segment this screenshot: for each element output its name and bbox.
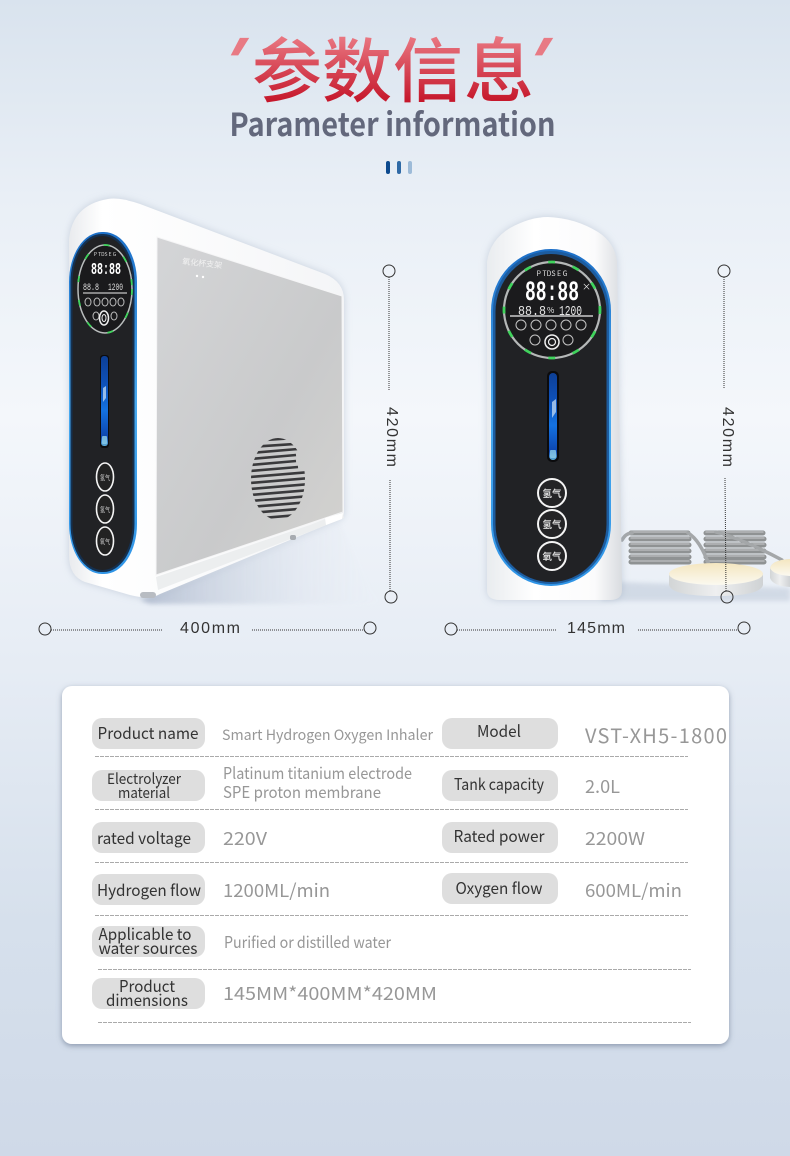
english subheading: Parameter information bbox=[230, 100, 556, 146]
display: 1200 bbox=[559, 304, 582, 320]
chinese heading: 息 bbox=[464, 16, 534, 117]
row: electrolyzer material: material bbox=[118, 782, 170, 803]
row: hydrogen and oxygen flow bbox=[92, 873, 682, 905]
power button bbox=[545, 335, 559, 349]
row: product name: VST-XH5-1800 bbox=[585, 720, 727, 749]
product: front view bbox=[487, 217, 790, 601]
three round buttons: 氧气 bbox=[100, 537, 110, 547]
display: 1200 bbox=[108, 283, 123, 294]
row: rated voltage: 220V bbox=[223, 825, 268, 851]
dimension: side view width 400mm: 400mm bbox=[180, 620, 240, 637]
row: electrolyzer material: Platinum titanium electrode bbox=[223, 760, 412, 784]
row: product dimensions: dimensions bbox=[106, 987, 188, 1011]
row: electrolyzer material: Tank capacity bbox=[454, 771, 545, 795]
row: rated voltage: rated voltage bbox=[97, 825, 191, 849]
three round buttons: 氧气 bbox=[542, 549, 562, 563]
row: hydrogen and oxygen flow: Oxygen flow bbox=[456, 875, 543, 899]
dimension: side view height 420mm: 420mm bbox=[383, 407, 400, 467]
display bbox=[78, 245, 132, 333]
dimension: side view width 400mm bbox=[39, 620, 376, 637]
three round buttons: 氢气 bbox=[100, 473, 110, 483]
row: product name: Smart Hydrogen Oxygen Inhaler bbox=[222, 724, 433, 745]
row: hydrogen and oxygen flow: 600ML/min bbox=[585, 877, 682, 903]
chinese heading bbox=[252, 16, 534, 117]
row: hydrogen and oxygen flow: 1200ML/min bbox=[223, 877, 330, 903]
white card bbox=[62, 686, 729, 1044]
black front capsule with blue ring bbox=[69, 232, 137, 574]
display: P TDS E G bbox=[94, 251, 117, 258]
row dividers bbox=[95, 756, 691, 1022]
three round buttons: 氢气 bbox=[100, 505, 110, 515]
water level window bbox=[100, 355, 109, 448]
left quote mark: ' bbox=[199, 24, 261, 102]
row: electrolyzer material bbox=[92, 760, 620, 803]
grey side panel bbox=[156, 237, 343, 575]
row: product name bbox=[92, 718, 727, 749]
cable coils bbox=[622, 532, 782, 565]
display: P TDS E G bbox=[536, 269, 568, 279]
row: applicable water sources: water sources bbox=[98, 935, 198, 959]
row: electrolyzer material: SPE proton membrane bbox=[223, 779, 381, 803]
water level window bbox=[547, 371, 559, 462]
display: 88:88 bbox=[525, 278, 579, 309]
row: applicable water sources: Applicable to bbox=[98, 921, 192, 945]
display: × bbox=[582, 280, 591, 293]
device body bbox=[69, 199, 344, 597]
right quote mark: ' bbox=[503, 24, 565, 102]
row: product dimensions bbox=[92, 973, 437, 1011]
display: % bbox=[547, 305, 555, 316]
chinese heading: 数 bbox=[322, 16, 392, 117]
three round buttons bbox=[538, 479, 566, 570]
row: product name: Product name bbox=[98, 720, 199, 744]
panel print and indicator dots bbox=[182, 256, 223, 278]
row: rated voltage: 2200W bbox=[585, 825, 645, 851]
row: applicable water sources bbox=[92, 921, 392, 959]
row: electrolyzer material: 2.0L bbox=[585, 773, 620, 799]
panel: parameter table bbox=[62, 686, 729, 1044]
display: 88.8 bbox=[518, 304, 546, 320]
dimension: front view width 145mm bbox=[445, 620, 750, 637]
dimension: front view width 145mm: 145mm bbox=[567, 620, 625, 637]
row: product name: Model bbox=[477, 718, 521, 742]
dimension: front view height 420mm: 420mm bbox=[719, 407, 736, 467]
chinese heading: 参 bbox=[252, 16, 322, 117]
product: side-angle view bbox=[66, 196, 347, 606]
bottom trim and feet bbox=[140, 512, 344, 598]
device body bbox=[487, 217, 622, 600]
chinese heading: 信 bbox=[393, 16, 463, 117]
floor shadow bbox=[140, 522, 385, 604]
floor shadow bbox=[600, 582, 790, 601]
display: 88.8 bbox=[83, 283, 99, 294]
panel print and indicator dots: 氧化杯支架 bbox=[182, 256, 223, 271]
row: electrolyzer material: Electrolyzer bbox=[107, 768, 181, 789]
row: applicable water sources: Purified or distilled water bbox=[224, 929, 392, 953]
round pads bbox=[669, 559, 790, 596]
dimension: front view height 420mm bbox=[718, 265, 736, 603]
three round buttons bbox=[96, 463, 114, 555]
three round buttons: 氢气 bbox=[542, 486, 562, 500]
black front capsule with blue ring bbox=[491, 249, 611, 586]
title bbox=[199, 16, 565, 174]
row: product dimensions: 145MM*400MM*420MM bbox=[223, 980, 437, 1006]
ventilation grille bbox=[251, 438, 305, 518]
display bbox=[504, 262, 600, 358]
row: product dimensions: Product bbox=[119, 973, 175, 997]
row: rated voltage bbox=[92, 822, 645, 853]
three round buttons: 氢气 bbox=[542, 517, 562, 531]
dimension: side view height 420mm bbox=[383, 265, 400, 603]
row: rated voltage: Rated power bbox=[454, 823, 545, 847]
display: 88:88 bbox=[91, 261, 121, 280]
three blue tick marks bbox=[386, 161, 412, 174]
row: hydrogen and oxygen flow: Hydrogen flow bbox=[97, 877, 201, 901]
